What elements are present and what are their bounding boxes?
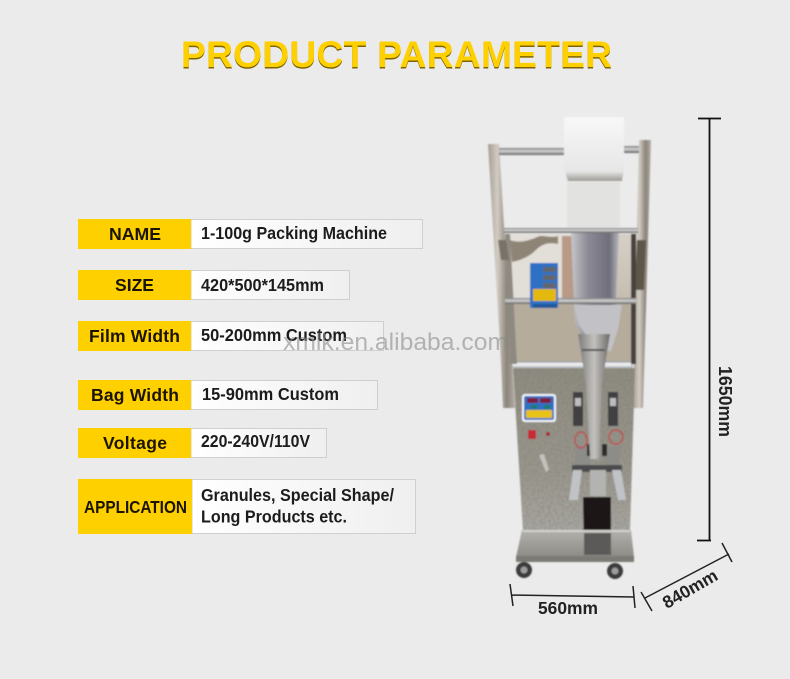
row: application: APPLICATION	[84, 497, 187, 517]
forming cone	[578, 334, 610, 459]
sealing assembly	[569, 392, 626, 500]
row: application	[78, 479, 416, 534]
row: name: NAME	[109, 224, 161, 244]
lower control panel	[522, 394, 556, 422]
right post	[633, 140, 651, 408]
machine body	[513, 368, 635, 530]
machine	[488, 117, 651, 579]
machine window	[504, 234, 634, 364]
upper control panel	[530, 263, 558, 308]
height dimension	[697, 118, 735, 540]
row: bag width	[78, 380, 378, 410]
width dimension: 560mm	[538, 598, 598, 618]
row: film width: Film Width	[89, 326, 180, 346]
row: film width: 50-200mm Custom	[201, 325, 347, 345]
title: PRODUCT PARAMETER	[181, 36, 612, 76]
row: voltage	[78, 428, 326, 458]
row: name: 1-100g Packing Machine	[201, 223, 387, 243]
row: film width	[78, 321, 384, 351]
watermark: xmlk.en.alibaba.com	[283, 329, 508, 356]
width dimension	[510, 584, 635, 618]
row: application: Long Products etc.	[201, 506, 347, 526]
film bag	[571, 232, 619, 352]
row: name	[78, 219, 422, 249]
toggle lever	[539, 454, 549, 472]
row: size: SIZE	[115, 275, 154, 295]
caster wheels	[516, 562, 623, 579]
base plate	[516, 530, 634, 557]
row: voltage: Voltage	[103, 433, 167, 453]
depth dimension	[641, 543, 732, 613]
power switch	[528, 430, 550, 439]
row: bag width: 15-90mm Custom	[202, 384, 339, 404]
film roll	[564, 117, 624, 229]
row: size: 420*500*145mm	[201, 275, 324, 295]
height dimension: 1650mm	[715, 366, 735, 437]
rods	[499, 148, 564, 155]
row: application: Granules, Special Shape/	[201, 485, 394, 505]
title: PRODUCT PARAMETER	[181, 34, 612, 75]
row: size	[78, 270, 350, 300]
row: bag width: Bag Width	[91, 385, 179, 405]
row: voltage: 220-240V/110V	[201, 431, 310, 451]
left post	[488, 144, 515, 408]
dark bag	[583, 497, 611, 555]
depth dimension: 840mm	[659, 565, 721, 613]
